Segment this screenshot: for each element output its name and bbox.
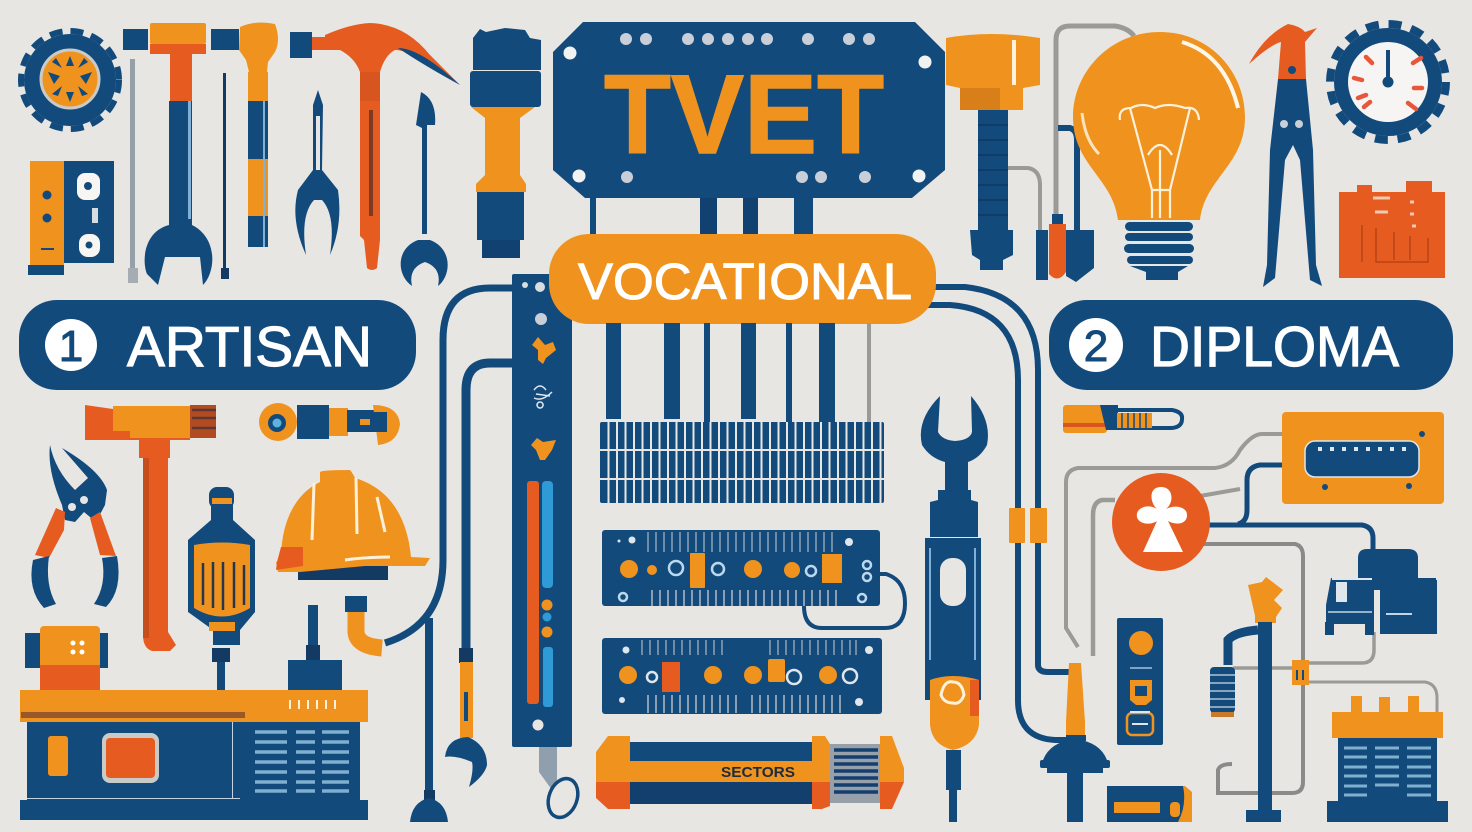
control panel upper xyxy=(602,530,880,606)
icon: block module xyxy=(28,161,114,275)
icon: red machine block xyxy=(1339,181,1445,278)
cable clips xyxy=(1009,508,1047,543)
icon: truck xyxy=(1325,549,1437,635)
icon: small spanner xyxy=(401,92,448,286)
icon: long hook tool xyxy=(445,648,487,787)
badge: 1 ARTISAN xyxy=(19,300,416,390)
icon: battery xyxy=(1327,696,1448,822)
icon: red emblem circle xyxy=(1112,473,1210,571)
cylinder: SECTORS: SECTORS xyxy=(721,764,795,781)
cables connecting sections xyxy=(385,287,1075,800)
label: VOCATIONAL: VOCATIONAL xyxy=(578,253,912,310)
machine: workbench xyxy=(20,605,368,820)
control panel lower xyxy=(602,638,882,714)
icon: thin black rod xyxy=(221,73,229,279)
orange junction box xyxy=(1292,660,1309,685)
icon: oil bottle drill xyxy=(188,487,255,690)
icon: pump post xyxy=(1210,577,1283,822)
icon: hard hat xyxy=(276,470,430,580)
icon: wheel tyre xyxy=(21,31,119,129)
badge: 2 DIPLOMA xyxy=(1049,300,1453,390)
badge: 1 ARTISAN: 1 xyxy=(59,322,83,371)
icon: cable foot xyxy=(410,790,448,822)
icon: claw hammer xyxy=(290,23,460,270)
icon: large pliers xyxy=(31,445,119,608)
heat sink comb xyxy=(600,323,884,503)
icon: light bulb xyxy=(1073,32,1245,280)
badge: 2 DIPLOMA: 2 xyxy=(1084,322,1108,371)
icon: big wrench tool xyxy=(921,396,988,822)
sign: TVET: TVET xyxy=(604,52,884,177)
wires on right side xyxy=(1066,434,1437,793)
cylinder: SECTORS xyxy=(596,736,904,809)
icon: plunger valve xyxy=(1040,663,1110,822)
icon: tall tool with striped handle xyxy=(211,23,278,247)
badge: 1 ARTISAN: ARTISAN xyxy=(127,315,372,379)
label: VOCATIONAL xyxy=(549,234,936,324)
sign: TVET xyxy=(553,22,945,240)
icon: paint brush xyxy=(470,28,541,258)
panel: orange display xyxy=(1282,412,1444,504)
icon: thin screwdriver xyxy=(128,59,138,283)
badge: 2 DIPLOMA: DIPLOMA xyxy=(1150,315,1399,379)
icon: orange hammer xyxy=(85,405,216,651)
icon: tape measure xyxy=(1107,786,1192,822)
icon: wired tools xyxy=(1008,26,1134,282)
icon: gauge gear xyxy=(1330,24,1446,140)
icon: bolt xyxy=(946,34,1040,270)
icon: hammer spanner xyxy=(123,23,212,285)
icon: tall pliers xyxy=(1249,24,1322,287)
icon: pipe elbow xyxy=(345,596,382,648)
instrument rail xyxy=(512,274,583,822)
icon: padlock xyxy=(1063,405,1182,433)
icon: small pliers xyxy=(295,90,339,255)
icon: small socket wrench xyxy=(259,403,400,445)
icon: meter card xyxy=(1117,618,1163,745)
